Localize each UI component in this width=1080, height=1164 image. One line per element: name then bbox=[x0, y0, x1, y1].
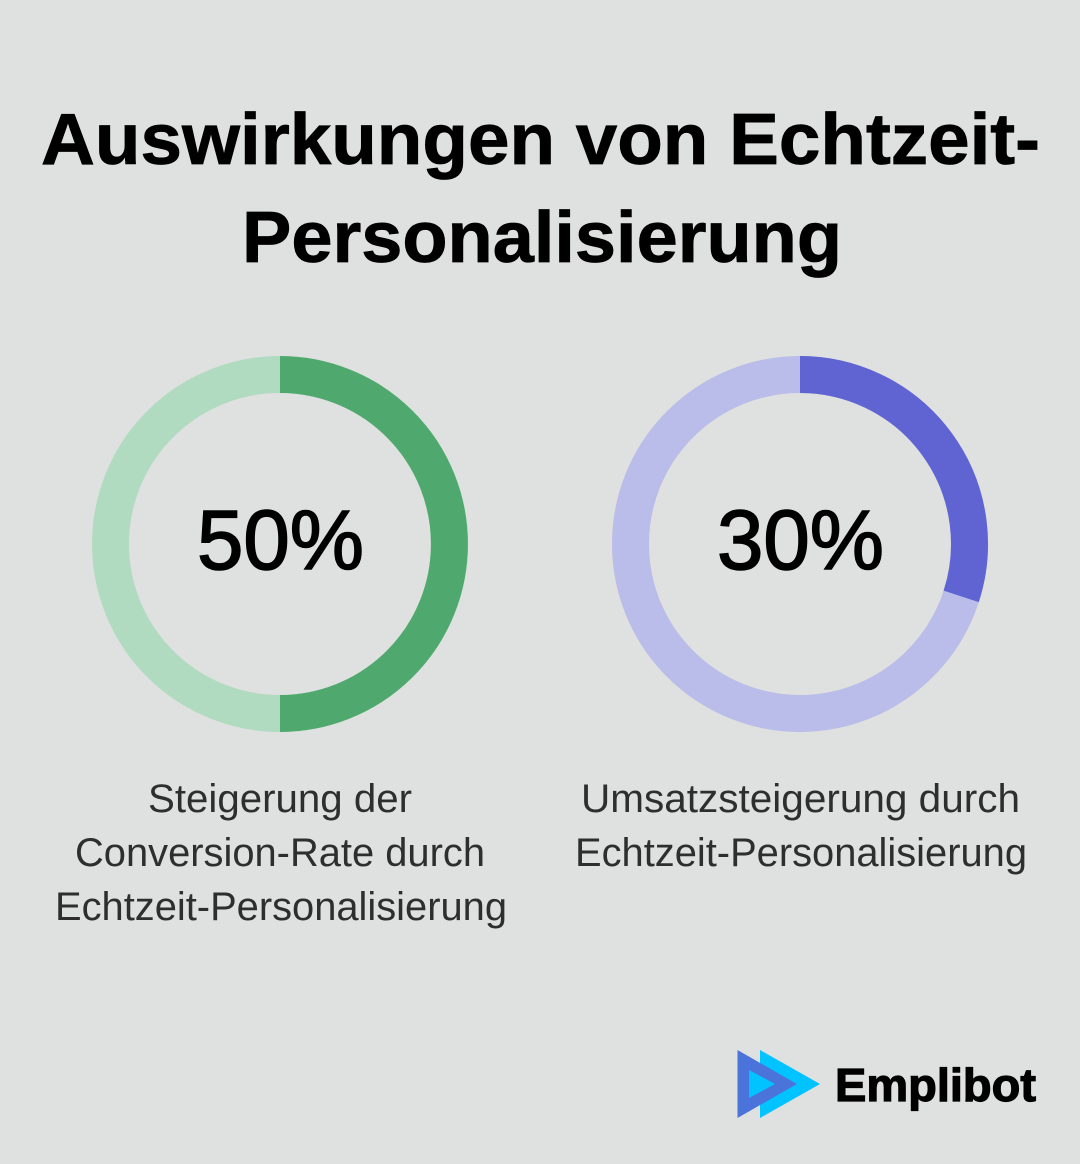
logo: Emplibot bbox=[738, 1050, 1036, 1118]
value: 30%: 30% bbox=[717, 493, 884, 587]
panel: revenue statistic bbox=[575, 374, 1027, 875]
label: revenue increase bbox=[575, 777, 1027, 875]
logo wordmark: Emplibot bbox=[835, 1059, 1036, 1111]
title: Auswirkungen von Echtzeit- bbox=[41, 100, 1040, 180]
label: conversion rate: Echtzeit-Personalisierung bbox=[55, 885, 507, 929]
label: conversion rate: Conversion-Rate durch bbox=[75, 831, 485, 875]
value: 50%: 50% bbox=[197, 493, 364, 587]
title: Personalisierung bbox=[242, 198, 842, 278]
panel: conversion rate statistic bbox=[55, 374, 507, 929]
label: conversion rate bbox=[55, 777, 507, 929]
label: conversion rate: Steigerung der bbox=[148, 777, 412, 821]
icon: play triangles bbox=[738, 1050, 820, 1118]
donut chart: 50% bbox=[110, 374, 450, 714]
label: revenue increase: Umsatzsteigerung durch bbox=[581, 777, 1020, 821]
label: revenue increase: Echtzeit-Personalisierung bbox=[575, 831, 1027, 875]
title bbox=[41, 100, 1040, 278]
donut chart: 30% bbox=[630, 374, 970, 714]
